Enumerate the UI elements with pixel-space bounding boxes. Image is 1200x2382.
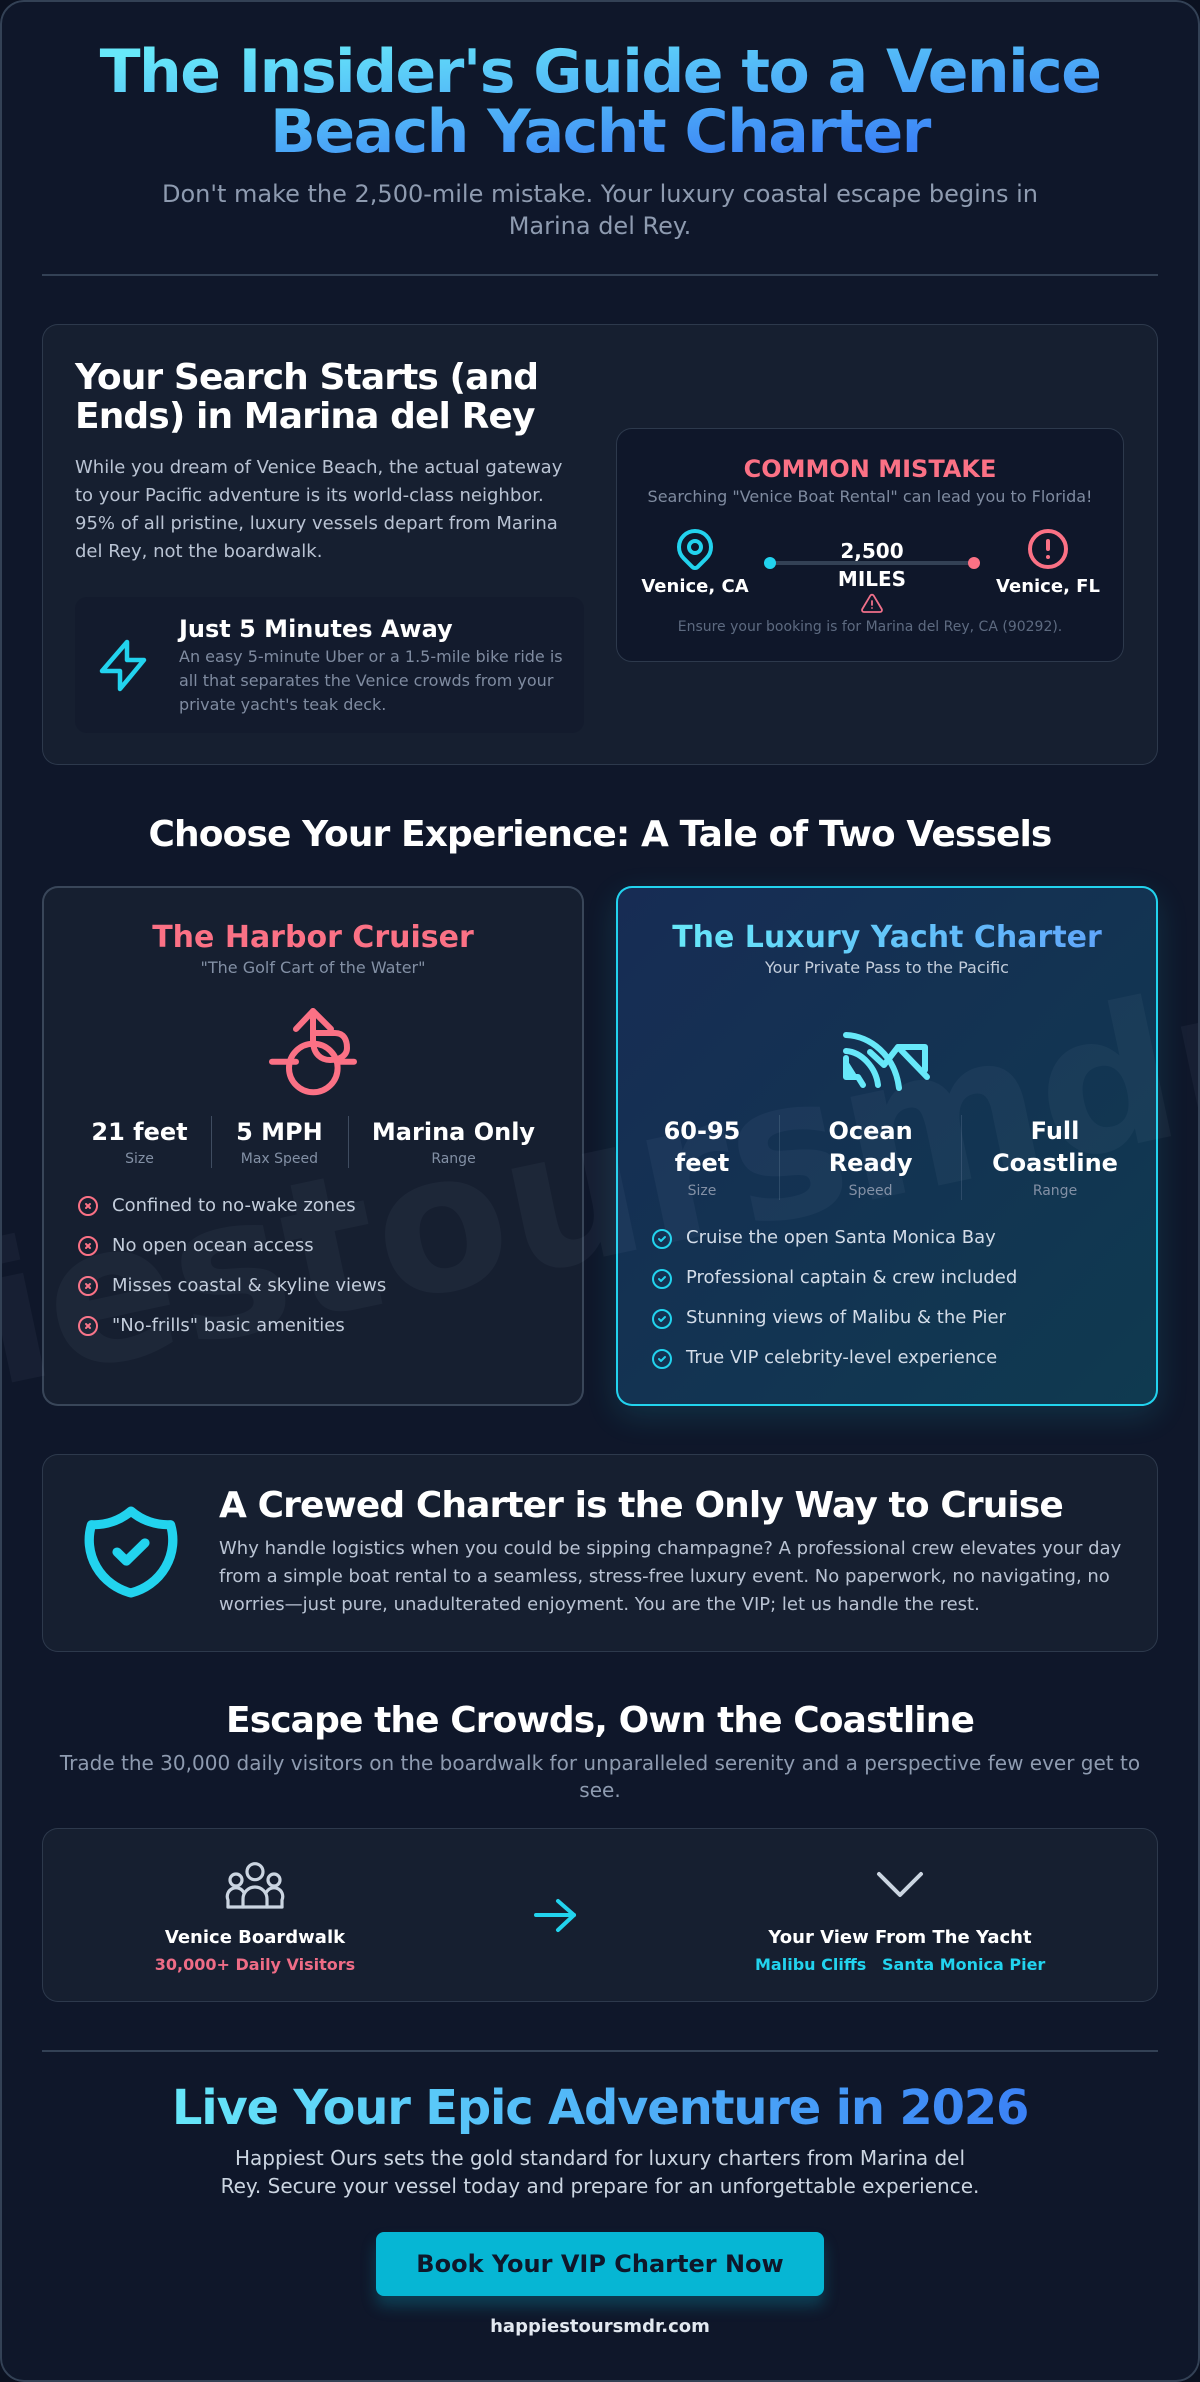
icon: chevron: [876, 1872, 924, 1898]
subtitle: Don't make the 2,500-mile mistake. Your luxury coastal escape begins in: [162, 180, 1038, 208]
label: your view: Your View From The Yacht: [768, 1927, 1032, 1948]
panel: luxury yacht charter: [616, 886, 1158, 1406]
label: venice boardwalk: Venice Boardwalk: [165, 1927, 345, 1948]
heading: choose your experience: Choose Your Experience: A Tale of Two Vessels: [149, 814, 1051, 854]
item: misses views: Misses coastal & skyline views: [112, 1275, 386, 1296]
item: views: Stunning views of Malibu & the Pier: [686, 1307, 1006, 1328]
label: venice fl: Venice, FL: [996, 576, 1100, 596]
icon: shield check: [84, 1506, 178, 1598]
stat: range: Coastline: [992, 1149, 1118, 1177]
label: venice ca: Venice, CA: [641, 576, 749, 596]
stat: speed: [236, 1118, 323, 1167]
route line: [764, 557, 980, 569]
crewed text: [219, 1538, 1121, 1615]
cta heading: Live Your Epic Adventure in 2026: [172, 2080, 1028, 2136]
mistake heading: COMMON MISTAKE: [744, 455, 996, 483]
body text: gateway: While you dream of Venice Beach, the actual gateway: [75, 456, 562, 478]
stat: range: Range: [1033, 1183, 1077, 1199]
list: harbor drawbacks: [78, 1195, 386, 1336]
callout text: [179, 647, 563, 714]
mistake text: Searching "Venice Boat Rental" can lead you to Florida!: [648, 486, 1092, 506]
panel: common mistake: [616, 428, 1124, 662]
heading: search starts: [74, 356, 538, 437]
stat: range: [372, 1118, 535, 1167]
stat: speed: 5 MPH: [236, 1118, 323, 1146]
button: book charter: Book Your VIP Charter Now: [416, 2250, 784, 2278]
icon: anchor boat: [269, 1008, 357, 1096]
distance label: MILES: [838, 567, 906, 591]
yacht tagline: Your Private Pass to the Pacific: [765, 958, 1009, 976]
escape subtitle: Trade the 30,000 daily visitors on the boardwalk for unparalleled serenity and a perspective few ever get to: [60, 1750, 1140, 1774]
item: vip experience: True VIP celebrity-level experience: [686, 1347, 997, 1368]
body text: gateway: 95% of all pristine, luxury vessels depart from Marina: [75, 512, 558, 534]
callout heading: Just 5 Minutes Away: [179, 615, 453, 643]
harbor title: The Harbor Cruiser: [152, 920, 474, 955]
stat: speed: [828, 1117, 913, 1199]
list: yacht benefits: [652, 1227, 1017, 1369]
escape subtitle: [60, 1750, 1140, 1802]
title: [42, 42, 1158, 162]
tag: malibu cliffs: Malibu Cliffs: [755, 1954, 866, 1974]
item: no ocean access: No open ocean access: [112, 1235, 314, 1256]
panel: marina del rey: [42, 324, 1158, 765]
callout: just 5 minutes away: [75, 597, 584, 733]
icon: lightning bolt: [100, 640, 146, 692]
icon: warning triangle: [861, 594, 883, 613]
stat: size: 60-95: [664, 1117, 740, 1145]
website: happiestoursmdr.com: [490, 2316, 710, 2337]
distance label: 2,500: [840, 539, 904, 563]
item: captain and crew: Professional captain & crew included: [686, 1267, 1017, 1288]
stat: size: [91, 1118, 188, 1167]
callout text: An easy 5-minute Uber or a 1.5-mile bike ride is: [179, 647, 563, 666]
stat: size: Size: [125, 1151, 154, 1167]
distance label: [838, 539, 906, 591]
stat: daily visitors: 30,000+ Daily Visitors: [155, 1954, 355, 1974]
escape subtitle: see.: [579, 1778, 621, 1802]
crewed heading: A Crewed Charter is the Only Way to Cruise: [219, 1484, 1063, 1526]
crewed text: Why handle logistics when you could be sipping champagne? A professional crew elevates your day: [219, 1538, 1121, 1559]
panel: crewed charter: [42, 1454, 1158, 1652]
item: no-wake zones: Confined to no-wake zones: [112, 1195, 356, 1216]
heading: search starts: Your Search Starts (and: [75, 356, 538, 398]
icon: crowd: [226, 1862, 284, 1909]
icon: yacht: [843, 1032, 930, 1091]
callout text: all that separates the Venice crowds from your: [179, 671, 553, 690]
heading: escape the crowds: Escape the Crowds, Own the Coastline: [226, 1700, 974, 1740]
stat: size: [664, 1117, 740, 1199]
body text: gateway: [75, 456, 562, 562]
stat: range: Full: [1031, 1117, 1079, 1145]
item: santa monica bay: Cruise the open Santa Monica Bay: [686, 1227, 996, 1248]
tag: santa monica pier: Santa Monica Pier: [882, 1954, 1045, 1974]
booking note: Ensure your booking is for Marina del Rey, CA (90292).: [678, 619, 1062, 635]
yacht title: The Luxury Yacht Charter: [672, 920, 1102, 955]
stat: size: 21 feet: [91, 1118, 188, 1146]
cta text: Rey. Secure your vessel today and prepare for an unforgettable experience.: [221, 2174, 979, 2198]
title: The Insider's Guide to a Venice: [100, 37, 1100, 107]
icon: alert circle: [1028, 529, 1068, 569]
subtitle: Marina del Rey.: [509, 212, 691, 240]
body text: gateway: del Rey, not the boardwalk.: [75, 540, 322, 562]
icon: map pin: [677, 529, 713, 570]
stat: range: Marina Only: [372, 1118, 535, 1146]
stat: range: [992, 1117, 1118, 1199]
crewed text: from a simple boat rental to a seamless, stress-free luxury event. No paperwork, no navigating, no: [219, 1566, 1110, 1587]
crewed text: worries—just pure, unadulterated enjoyment. You are the VIP; let us handle the rest.: [219, 1594, 980, 1615]
stat: speed: Max Speed: [241, 1151, 318, 1167]
body text: gateway: to your Pacific adventure is its world-class neighbor.: [75, 484, 544, 506]
stat: range: Range: [431, 1151, 476, 1167]
cta text: [221, 2146, 979, 2198]
harbor tagline: "The Golf Cart of the Water": [200, 958, 425, 976]
stat: speed: Ocean: [828, 1117, 913, 1145]
item: basic amenities: "No-frills" basic amenities: [112, 1315, 345, 1336]
arrow: [534, 1898, 576, 1932]
title: Beach Yacht Charter: [270, 97, 930, 167]
cta text: Happiest Ours sets the gold standard for luxury charters from Marina del: [235, 2146, 965, 2170]
panel: harbor cruiser: [42, 886, 584, 1406]
panel: boardwalk vs yacht: [42, 1828, 1158, 2002]
stat: size: feet: [675, 1149, 729, 1177]
callout text: private yacht's teak deck.: [179, 695, 386, 714]
subtitle: [162, 180, 1038, 240]
stat: speed: Ready: [829, 1149, 912, 1177]
stat: speed: Speed: [849, 1183, 893, 1199]
stat: size: Size: [688, 1183, 716, 1199]
button: book charter: [376, 2232, 824, 2296]
heading: search starts: Ends) in Marina del Rey: [75, 396, 535, 437]
